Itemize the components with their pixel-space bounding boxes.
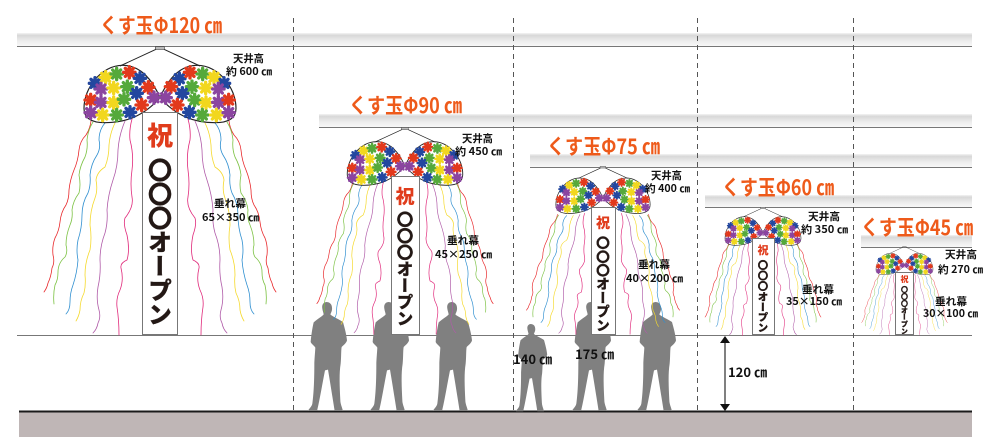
kusudama 45 cm: 〇〇〇オープン: [900, 285, 910, 334]
kusudama 120 cm: 祝: [147, 116, 173, 153]
kusudama 120 cm: [44, 47, 276, 335]
labels: banner 30x100: 垂れ幕: [935, 294, 968, 309]
ceiling bar: 90 cm: [319, 114, 972, 127]
labels: banner 65x350: 65×350 ㎝: [202, 210, 260, 225]
kusudama 90 cm: 祝: [395, 182, 415, 209]
kusudama 75 cm: 祝: [596, 213, 610, 233]
labels: ceiling height 450: 約 450 ㎝: [455, 144, 503, 159]
labels: banner 45x250: 垂れ幕: [447, 233, 480, 248]
labels: banner 30x100: 30×100 ㎝: [923, 306, 979, 321]
kusudama 90 cm: 〇〇〇オープン: [393, 211, 417, 326]
kusudama 60 cm: 〇〇〇オープン: [756, 260, 770, 333]
people silhouettes: [308, 302, 676, 411]
title: 60 cm: くす玉Φ60 ㎝: [722, 172, 834, 202]
labels: ceiling height 400: 天井高: [651, 168, 682, 183]
label: 140 cm person: 140 ㎝: [513, 349, 552, 368]
kusudama 120 cm: 〇〇〇オープン: [142, 158, 178, 326]
arrow: 120 cm height: [720, 336, 730, 411]
floor: [19, 412, 972, 437]
kusudama 60 cm: [705, 207, 821, 336]
labels: ceiling height 350: 天井高: [808, 209, 840, 224]
title: 120 cm: くす玉Φ120 ㎝: [100, 10, 222, 40]
title: 75 cm: くす玉Φ75 ㎝: [547, 131, 660, 161]
floor line: [19, 410, 972, 412]
ceiling bar: 60 cm: [705, 195, 972, 207]
kusudama 75 cm: 〇〇〇オープン: [593, 236, 613, 332]
labels: ceiling height 450: 天井高: [462, 131, 493, 146]
kusudama 75 cm: [526, 166, 680, 334]
labels: banner 35x150: 35×150 ㎝: [786, 294, 843, 309]
kusudama 60 cm: 祝: [758, 242, 768, 258]
labels: banner 65x350: 垂れ幕: [214, 196, 247, 211]
kusudama 45 cm: 祝: [900, 274, 908, 285]
ceiling bar: 120 cm: [17, 33, 972, 46]
labels: ceiling height 270: 天井高: [945, 247, 977, 262]
ceiling bar: 45 cm: [861, 235, 972, 247]
labels: banner 40x200: 40×200 ㎝: [626, 271, 684, 286]
labels: banner 45x250: 45×250 ㎝: [435, 247, 493, 262]
title: 90 cm: くす玉Φ90 ㎝: [349, 90, 462, 120]
ceiling bar: 75 cm: [530, 154, 972, 167]
labels: banner 35x150: 垂れ幕: [802, 282, 835, 297]
labels: ceiling height 270: 約 270 ㎝: [938, 262, 983, 277]
title: 45 cm: くす玉Φ45 ㎝: [861, 212, 973, 242]
kusudama 90 cm: [317, 128, 493, 334]
label: 175 cm person: 175 ㎝: [575, 344, 614, 363]
label: 120 cm height: 120 ㎝: [728, 362, 767, 381]
labels: banner 40x200: 垂れ幕: [638, 257, 671, 272]
labels: ceiling height 600: 約 600 ㎝: [226, 64, 273, 79]
kusudama 45 cm: [862, 246, 947, 335]
labels: ceiling height 600: 天井高: [233, 51, 264, 66]
labels: ceiling height 400: 約 400 ㎝: [645, 181, 690, 196]
labels: ceiling height 350: 約 350 ㎝: [801, 222, 849, 237]
